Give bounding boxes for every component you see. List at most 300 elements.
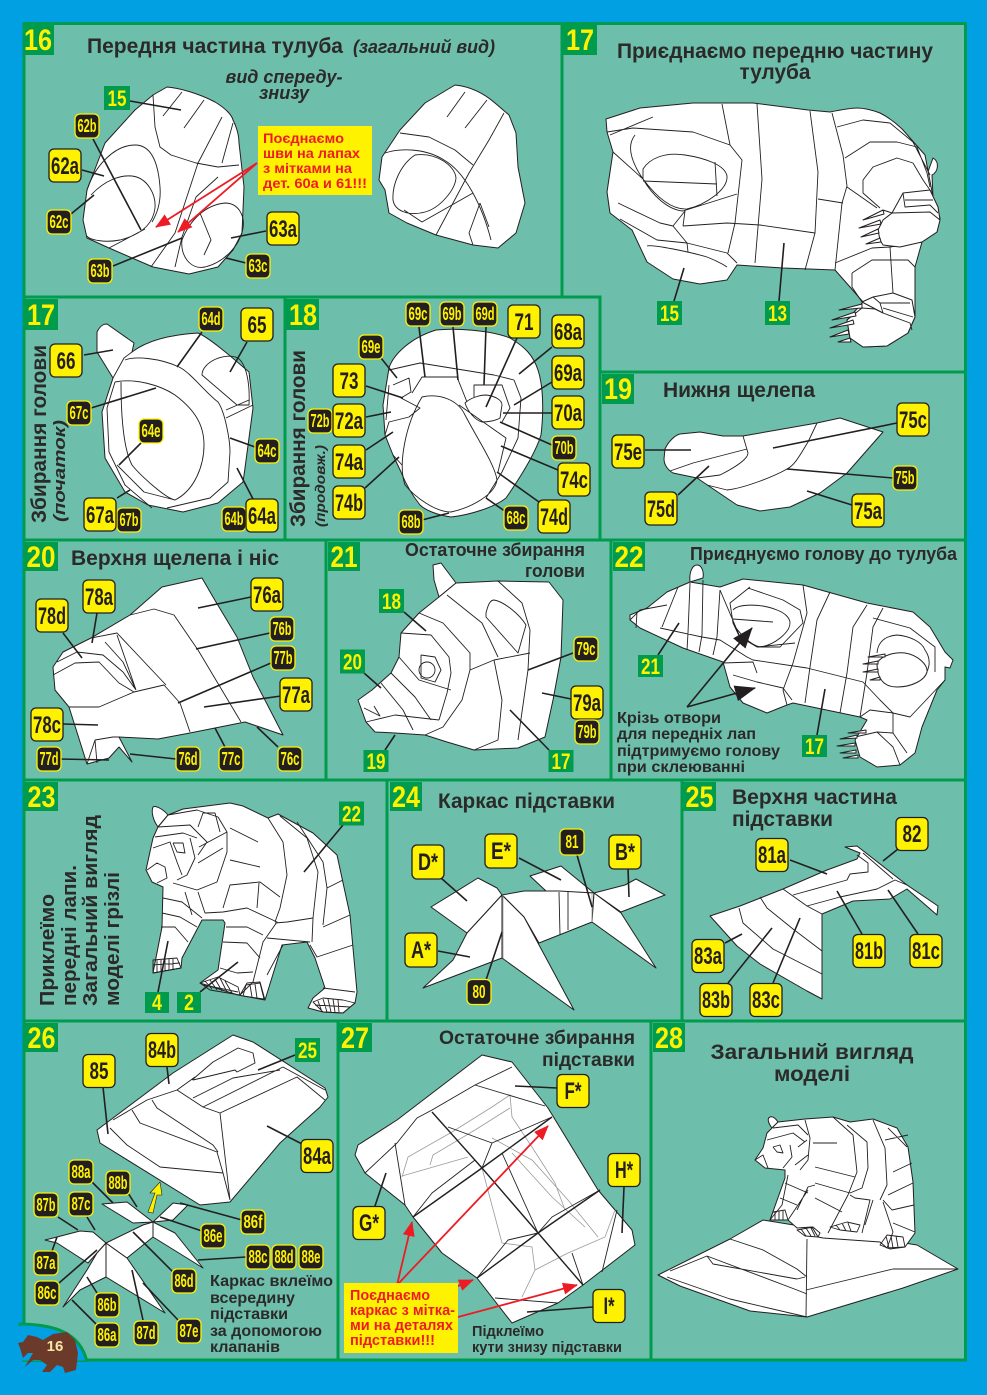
label 74d: 74d [540, 504, 568, 531]
heading: Верхня частина [732, 786, 897, 809]
step number 20: 20 [26, 541, 56, 574]
finished model on base [658, 1117, 958, 1317]
leader lines [658, 623, 825, 735]
step number 28: 28 [655, 1022, 683, 1055]
label 83a: 83a [694, 943, 722, 970]
label 64d [199, 307, 223, 331]
label 81c: 81c [912, 938, 940, 965]
label 86c: 86c [38, 1283, 56, 1303]
step number 21: 21 [330, 541, 358, 574]
heading [710, 1041, 914, 1086]
label 75d: 75d [647, 496, 675, 523]
label 64c: 64c [258, 441, 276, 461]
label 82: 82 [902, 821, 922, 848]
assembled head figure [358, 563, 563, 750]
label 22: 22 [342, 802, 361, 826]
label 88c: 88c [248, 1247, 268, 1267]
label 69e [359, 335, 383, 359]
label 74a: 74a [335, 449, 363, 476]
label 76b: 76b [272, 619, 292, 639]
step number 18: 18 [289, 299, 317, 332]
label 81b: 81b [855, 938, 883, 965]
label 81c [910, 934, 942, 968]
view note: знизу [259, 83, 310, 103]
label 81: 81 [566, 832, 578, 852]
heading [405, 540, 585, 581]
note: Крізь отвори [617, 710, 721, 727]
label 82 [896, 818, 928, 850]
label 75b [893, 466, 917, 490]
leader lines [725, 849, 918, 983]
heading: підставки [542, 1050, 635, 1071]
heading [617, 40, 933, 84]
callout: match seams: шви на лапах [263, 145, 360, 161]
label 67a [84, 498, 116, 531]
label 68a [552, 315, 584, 348]
label 69e: 69e [362, 337, 380, 357]
label I*: I* [604, 1293, 615, 1320]
vertical note: моделі грізлі [102, 872, 124, 1006]
panel: step 21 final head assembly [326, 540, 611, 780]
callout: match seams: дет. 60а и 61!!! [263, 175, 367, 191]
panel: step 24 base frame [387, 780, 682, 1021]
label 64e [139, 419, 163, 443]
label 77d [37, 747, 61, 771]
label E* [485, 834, 517, 868]
panel: step 28 finished model [651, 1021, 966, 1360]
label 69d [473, 302, 497, 326]
label 70a: 70a [554, 400, 582, 427]
label 88d [272, 1245, 296, 1269]
label 69a: 69a [554, 360, 582, 387]
note: клапанів [210, 1339, 280, 1356]
label 64b [222, 507, 246, 531]
label 88b: 88b [108, 1173, 128, 1193]
label 88b [106, 1171, 130, 1195]
panel: step 19 lower jaw [600, 372, 966, 540]
label 76b [270, 617, 294, 641]
label 67b: 67b [120, 510, 138, 530]
label 88a: 88a [72, 1162, 91, 1182]
note: кути знизу підставки [472, 1340, 622, 1356]
label 19: 19 [366, 749, 386, 774]
label 83c [750, 984, 782, 1016]
heading: Приєднаємо передню частину [617, 40, 933, 63]
callout: align frame: каркас з мітка- [350, 1303, 455, 1319]
label 62c: 62c [50, 212, 68, 232]
label A* [405, 933, 437, 967]
arrow: red to bottom mark [458, 1285, 577, 1317]
callout: align frame [344, 1283, 458, 1353]
lower jaw figure [664, 418, 883, 511]
label 67a: 67a [86, 502, 114, 529]
label 77b [271, 646, 295, 670]
bear torso with rear legs [606, 103, 940, 347]
label 79c: 79c [576, 639, 596, 659]
label 64b: 64b [224, 509, 244, 529]
torso rear view right [379, 85, 525, 248]
label 70b: 70b [554, 438, 574, 458]
label 74c: 74c [560, 467, 588, 494]
panel: step 18 head continued [285, 297, 600, 540]
label 62b [75, 114, 99, 138]
label 77b: 77b [274, 648, 292, 668]
label 65 [241, 308, 273, 341]
label 88c [246, 1245, 270, 1269]
heading [732, 786, 897, 831]
label 79c [574, 637, 598, 661]
label 83b [700, 984, 732, 1016]
leader lines [365, 327, 558, 520]
step number 22: 22 [614, 541, 644, 574]
label 83a [692, 940, 724, 972]
label 68a: 68a [554, 319, 582, 346]
label 81b [853, 934, 885, 968]
grizzly bear model [146, 803, 357, 1013]
label 78d: 78d [38, 603, 66, 630]
label 15: 15 [108, 86, 126, 111]
leader lines [375, 1086, 624, 1312]
label F* [557, 1074, 589, 1108]
leader lines [158, 825, 343, 992]
left edge blue cover [0, 1326, 22, 1395]
vertical note: передні лапи. [59, 865, 81, 1006]
label 78a [83, 580, 115, 613]
note: підставки [210, 1306, 288, 1323]
panel: step 22 attach head to body [611, 540, 966, 780]
label 76d [176, 747, 200, 771]
base shell figure [97, 1035, 328, 1205]
label 87e: 87e [180, 1321, 198, 1341]
label 75e [612, 435, 644, 468]
step number 16: 16 [24, 24, 52, 57]
label 63a: 63a [269, 216, 297, 243]
label 86f [241, 1210, 265, 1234]
note: для передніх лап [617, 726, 756, 743]
label 74b [333, 486, 365, 519]
label 79a: 79a [573, 690, 601, 717]
label 77c [219, 747, 243, 771]
vertical heading: Збирання голови [28, 345, 51, 523]
label 69a [552, 356, 584, 389]
view note: вид спереду- [226, 67, 342, 87]
page corner cutout [20, 1324, 87, 1362]
label 15: 15 [660, 301, 679, 326]
note: при склеюванні [617, 759, 745, 776]
label 25: 25 [298, 1038, 317, 1063]
frame figure [423, 866, 665, 1010]
label 75a: 75a [854, 498, 882, 525]
label 88a [69, 1160, 93, 1184]
label 72a: 72a [335, 408, 363, 435]
label 62b: 62b [78, 116, 96, 136]
heading: тулуба [740, 61, 811, 84]
label 63b [88, 259, 112, 283]
label 72a [333, 404, 365, 437]
leader lines [52, 1055, 302, 1325]
label 74d [538, 500, 570, 533]
head assembly [383, 329, 543, 517]
leader lines [84, 332, 255, 499]
label 74b: 74b [335, 490, 363, 517]
heading: Загальний вигляд [710, 1041, 914, 1064]
leader lines [674, 243, 784, 301]
note [472, 1324, 622, 1356]
arrow: red to far mark [397, 1126, 548, 1285]
label 64a [246, 499, 278, 532]
label 79b [575, 720, 599, 744]
label 77a [280, 678, 312, 711]
label 86c [35, 1281, 59, 1305]
label 64e: 64e [142, 421, 160, 441]
label 68b: 68b [402, 512, 420, 532]
label 4: 4 [152, 990, 163, 1015]
label 78c [31, 708, 63, 741]
label 81 [560, 829, 584, 855]
heading: підставки [732, 808, 833, 831]
label 63a [267, 212, 299, 245]
base top figure [710, 846, 938, 999]
label 77c: 77c [222, 749, 240, 769]
label 87d: 87d [136, 1323, 156, 1343]
label H*: H* [615, 1157, 633, 1184]
leader lines [364, 612, 573, 750]
label 71 [508, 305, 540, 338]
label 83b: 83b [702, 987, 730, 1014]
label 88e: 88e [302, 1247, 320, 1267]
label 64d: 64d [202, 309, 220, 329]
label 67b [117, 508, 141, 532]
label 86b: 86b [98, 1295, 116, 1315]
label 63b: 63b [90, 261, 110, 281]
leader lines [59, 597, 281, 760]
label 86a [95, 1323, 119, 1347]
label 80 [467, 980, 491, 1004]
label 69b: 69b [442, 304, 462, 324]
label 69b [440, 302, 464, 326]
label 68c: 68c [506, 508, 526, 528]
vertical note: Загальний вигляд [80, 815, 102, 1006]
label 71: 71 [514, 309, 534, 336]
label 86e [201, 1224, 225, 1248]
label 86b [95, 1293, 119, 1317]
label 62a: 62a [51, 153, 79, 180]
base underside figure [355, 1055, 635, 1323]
label 87c: 87c [72, 1194, 90, 1214]
label 87b [34, 1193, 58, 1217]
label 85: 85 [90, 1058, 108, 1085]
label E*: E* [491, 838, 512, 865]
label 84b [146, 1034, 178, 1066]
heading: Нижня щелепа [663, 379, 815, 402]
label 87c [69, 1192, 93, 1216]
label 86d: 86d [174, 1271, 194, 1291]
label G* [353, 1206, 385, 1240]
label 75c: 75c [899, 407, 927, 434]
leader lines [645, 423, 897, 505]
label 66: 66 [56, 348, 76, 375]
label 75b: 75b [896, 468, 914, 488]
callout: align frame: підставки!!! [350, 1333, 435, 1349]
step number 24: 24 [392, 781, 420, 814]
label 72b: 72b [310, 411, 330, 431]
label 70a [552, 396, 584, 429]
label 65: 65 [248, 312, 266, 339]
head assembly [97, 324, 253, 512]
heading: Остаточне збирання [439, 1028, 635, 1049]
label 85 [83, 1054, 115, 1088]
label 87d [134, 1321, 158, 1345]
label 2 [177, 990, 201, 1015]
step number 26: 26 [28, 1022, 56, 1055]
page number: 16 [47, 1338, 63, 1355]
heading note: (загальний вид) [353, 37, 495, 57]
label 68b [399, 510, 423, 534]
step number 25: 25 [686, 781, 714, 814]
label 78d [36, 599, 68, 632]
label 78a: 78a [85, 584, 113, 611]
note [617, 710, 780, 776]
callout: align frame: ми на деталях [350, 1318, 453, 1334]
label 81a: 81a [758, 842, 786, 869]
label 84a [301, 1140, 333, 1172]
label 75c [897, 403, 929, 436]
label 69c [406, 302, 430, 326]
callout: match seams: з мітками на [263, 160, 352, 176]
label 63c [246, 254, 270, 278]
label 63c: 63c [248, 256, 268, 276]
arrow: red second [178, 163, 257, 232]
label 13: 13 [768, 301, 787, 326]
label 69d: 69d [476, 304, 494, 324]
heading: Остаточне збирання [405, 540, 585, 560]
note: підтримуємо голову [617, 743, 780, 760]
label 73 [333, 364, 365, 397]
note: за допомогою [210, 1323, 322, 1340]
heading: моделі [774, 1063, 850, 1086]
label 62a [49, 149, 81, 182]
label G*: G* [359, 1210, 379, 1237]
label 2: 2 [184, 990, 194, 1015]
note [210, 1273, 333, 1356]
label 88e [299, 1245, 323, 1269]
upper jaw figure [53, 578, 283, 764]
label 86f: 86f [244, 1212, 263, 1232]
leader lines [71, 101, 266, 266]
label 18: 18 [382, 589, 401, 614]
panel: step 26 glue frame inside base [24, 1021, 338, 1360]
label 87e [177, 1319, 201, 1343]
label 78c: 78c [33, 712, 61, 739]
label 73: 73 [340, 368, 358, 395]
bear side view [630, 565, 953, 767]
label D*: D* [418, 849, 438, 876]
torso front view left [83, 87, 244, 274]
label 84b: 84b [148, 1037, 176, 1064]
label 76d: 76d [178, 749, 198, 769]
vertical heading: Збирання голови [287, 350, 310, 527]
label 62c [47, 210, 71, 234]
label 87b: 87b [36, 1195, 56, 1215]
heading: голови [525, 561, 585, 581]
label I* [593, 1290, 625, 1322]
label 66 [50, 344, 82, 377]
label 20: 20 [343, 650, 362, 674]
label 17: 17 [805, 734, 824, 759]
arrow: to body hole [687, 628, 752, 707]
view note [226, 67, 342, 103]
bottom page block [0, 1362, 90, 1395]
label 67c: 67c [70, 403, 88, 423]
arrow: red to corner [397, 1222, 412, 1285]
label 77d: 77d [40, 749, 58, 769]
label 87a: 87a [36, 1253, 56, 1273]
icon: brown bear [18, 1332, 78, 1373]
label 68c [504, 506, 528, 530]
label 86d [172, 1269, 196, 1293]
leader lines [438, 855, 629, 980]
step number 17: 17 [566, 24, 594, 57]
heading: Каркас підставки [438, 790, 615, 813]
arrow: red to lower mark [453, 1280, 473, 1288]
arrow: to paw hole [687, 688, 755, 707]
label 84a: 84a [303, 1143, 331, 1170]
label 64a: 64a [248, 503, 276, 530]
panel: step 25 top of base [682, 780, 966, 1021]
label 79a [571, 686, 603, 719]
label 75e: 75e [614, 439, 642, 466]
callout: match seams: Поєднаємо [263, 130, 344, 146]
label 69c: 69c [408, 304, 428, 324]
heading: Передня частина тулуба [87, 35, 343, 58]
vertical note: (початок) [50, 420, 69, 522]
label 76c: 76c [280, 749, 300, 769]
heading: Верхня щелепа і ніс [71, 547, 279, 570]
panel: step 20 upper jaw and nose [24, 540, 326, 780]
label B* [609, 835, 641, 869]
panel: step 23 front paws [24, 780, 387, 1021]
label 4 [145, 990, 169, 1015]
label 76a [251, 578, 283, 611]
vertical note: Приклеїмо [37, 894, 59, 1006]
panel: step 16 front torso [23, 24, 562, 297]
page number bear [18, 1332, 78, 1373]
step number 23: 23 [28, 781, 56, 814]
step number 17: 17 [27, 299, 55, 332]
label 75a [852, 494, 884, 527]
label 83c: 83c [752, 987, 780, 1014]
label 86e: 86e [204, 1226, 222, 1246]
label 74c [558, 463, 590, 496]
callout: align frame: Поєднаємо [350, 1288, 430, 1304]
label 88d: 88d [274, 1247, 294, 1267]
arrow: red [156, 163, 257, 227]
note: Каркас вклеїмо [210, 1273, 333, 1290]
label 76a: 76a [253, 582, 281, 609]
note: всередину [210, 1290, 295, 1307]
heading [439, 1028, 635, 1071]
label 70b [552, 436, 576, 460]
label 64c [255, 439, 279, 463]
label 87a [34, 1251, 58, 1275]
label A*: A* [411, 937, 431, 964]
panel: step 27 final base assembly [338, 1021, 651, 1360]
label D* [412, 845, 444, 879]
arrow: yellow upward [148, 1182, 162, 1213]
panel: step 17 attach torso [562, 24, 966, 372]
label 74a [333, 445, 365, 478]
label F*: F* [564, 1078, 582, 1105]
